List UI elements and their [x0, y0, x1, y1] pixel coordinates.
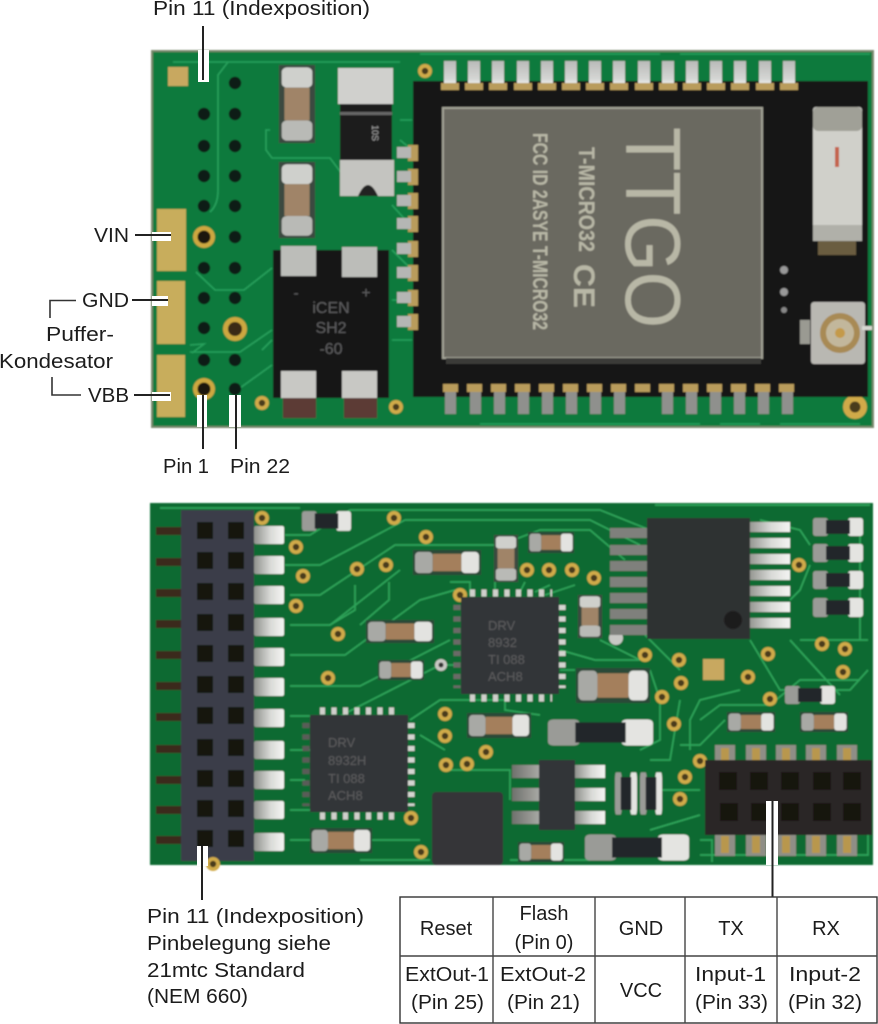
capacitors and resistors — [302, 511, 863, 862]
diode: 10S — [370, 125, 380, 141]
bridge rectifier: + — [361, 285, 371, 302]
QFN chip lower — [306, 711, 411, 816]
label: VBB: VBB — [88, 385, 129, 407]
shielding can with TTGO marking: T-MICRO32 — [574, 147, 599, 252]
label: Puffer-Kondensator: Kondesator — [0, 351, 113, 373]
leader lines top board — [50, 26, 241, 449]
shielding can with TTGO marking — [443, 108, 762, 364]
table: service connector pinout: ExtOut-2 — [500, 964, 586, 986]
shielding can with TTGO marking: FCC ID 2ASYE T-MICRO32 — [528, 133, 551, 330]
QFN chip lower: 8932H — [328, 753, 366, 768]
header pins left — [156, 527, 182, 844]
table: service connector pinout: (Pin 0) — [515, 932, 573, 954]
table: service connector pinout: RX — [812, 918, 840, 940]
gold test pad — [703, 659, 724, 680]
text block: Pin 11 pin assignment — [147, 906, 364, 1008]
pin header holes — [193, 64, 867, 419]
text block: Pin 11 pin assignment: Pinbelegung siehe — [147, 933, 331, 955]
text block: Pin 11 pin assignment: 21mtc Standard — [147, 960, 305, 982]
PCB top traces — [173, 54, 870, 424]
module bottom pins — [443, 384, 794, 414]
capacitors — [279, 65, 315, 238]
contact pads VIN GND VBB — [157, 209, 186, 271]
QFN chip lower: DRV — [328, 735, 356, 750]
solder pads next to header — [254, 526, 284, 851]
shielding can with TTGO marking: TTGO — [609, 127, 697, 328]
bridge rectifier — [273, 246, 389, 418]
label: VIN: VIN — [94, 225, 129, 247]
label: Puffer-Kondensator — [0, 324, 114, 373]
photo: top side of decoder board — [152, 51, 873, 427]
QFN chip upper: ACH8 — [488, 669, 523, 684]
QFN chip lower: TI 088 — [328, 771, 365, 786]
service connector — [705, 745, 872, 856]
QFN chip lower: ACH8 — [328, 788, 363, 803]
label: Pin 1: Pin 1 — [163, 456, 209, 478]
bridge rectifier: - — [293, 285, 299, 302]
QFN chip upper: 8932 — [488, 635, 517, 650]
text block: Pin 11 pin assignment: (NEM 660) — [147, 986, 248, 1008]
table: service connector pinout: (Pin 25) — [411, 992, 484, 1014]
table: service connector pinout — [400, 897, 877, 1023]
table: service connector pinout: Input-1 — [695, 964, 766, 986]
table: service connector pinout: Input-2 — [789, 964, 861, 986]
PCB bottom — [150, 503, 873, 865]
SOT transistor — [512, 760, 605, 830]
table: service connector pinout: Reset — [420, 918, 473, 940]
TSSOP chip — [610, 518, 790, 639]
gold test pad — [168, 67, 188, 86]
ceramic antenna — [780, 107, 862, 313]
table: service connector pinout: GND — [619, 918, 663, 940]
table: service connector pinout: ExtOut-1 — [405, 964, 489, 986]
bridge rectifier: SH2 — [315, 320, 347, 337]
table: service connector pinout: (Pin 33) — [695, 992, 768, 1014]
module top pins — [441, 61, 798, 90]
leader lines bottom board — [197, 801, 778, 900]
table: service connector pinout: (Pin 21) — [507, 992, 580, 1014]
QFN chip upper — [457, 593, 562, 698]
shielding can with TTGO marking: CE — [567, 264, 600, 308]
21mtc socket header — [181, 510, 254, 861]
PCB bottom traces — [160, 505, 870, 862]
text block: Pin 11 pin assignment: Pin 11 (Indexposition) — [147, 906, 364, 928]
antenna connector — [800, 302, 872, 364]
module left pins — [397, 145, 418, 330]
table: service connector pinout: (Pin 32) — [788, 992, 862, 1014]
label: Puffer-Kondensator: Puffer- — [46, 324, 114, 346]
diode — [338, 68, 394, 196]
table: service connector pinout: TX — [718, 918, 744, 940]
inductor block — [432, 792, 503, 865]
QFN chip upper: DRV — [488, 618, 516, 633]
label: Pin 22: Pin 22 — [230, 456, 290, 478]
vias — [206, 511, 852, 871]
bridge rectifier: -60 — [319, 341, 343, 358]
table: service connector pinout: VCC — [620, 980, 662, 1002]
label: GND: GND — [82, 290, 129, 312]
bridge rectifier: iCEN — [312, 300, 350, 317]
table: service connector pinout: Flash — [520, 903, 568, 925]
QFN chip upper: TI 088 — [488, 652, 525, 667]
module board — [413, 81, 868, 397]
PCB top — [152, 51, 873, 427]
photo: bottom side of decoder board — [150, 503, 873, 871]
